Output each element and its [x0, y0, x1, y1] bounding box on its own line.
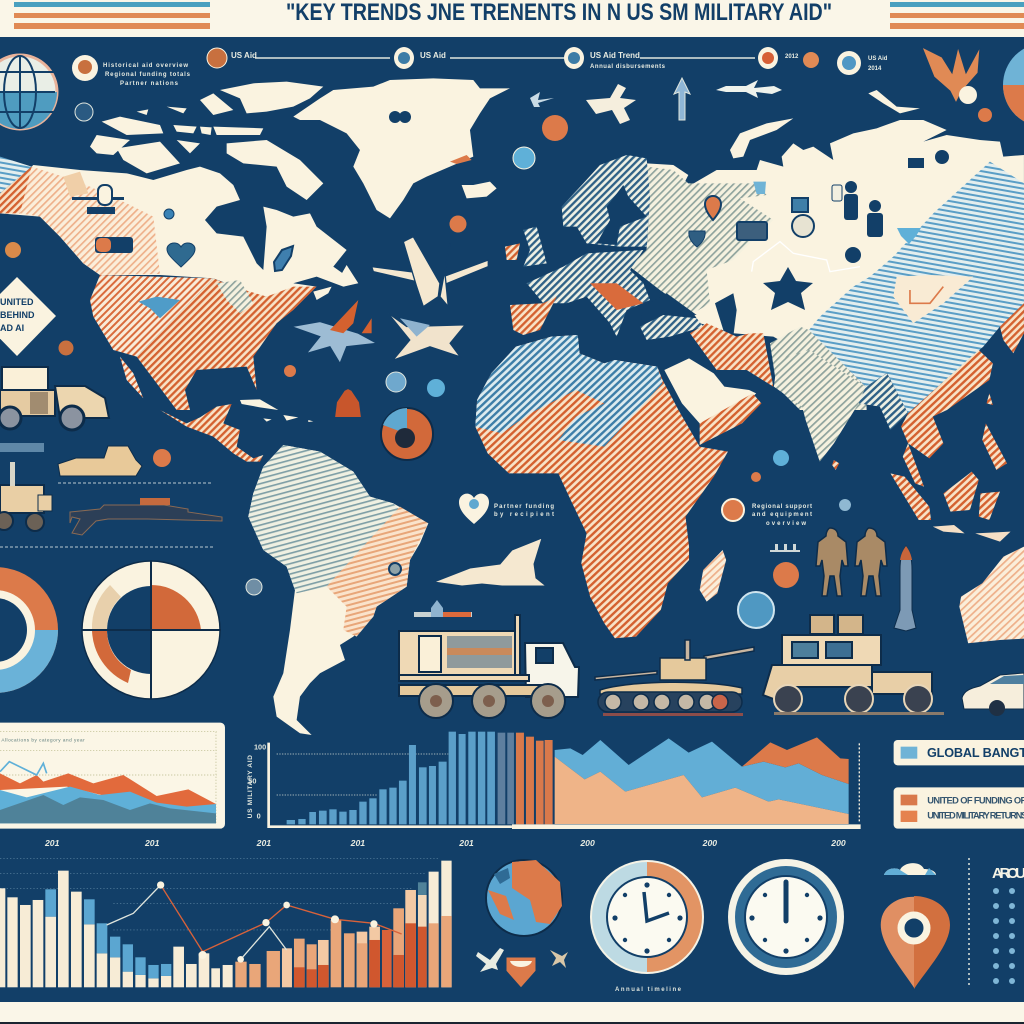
- teal cap: [418, 882, 427, 895]
- panel: area chart left: [0, 723, 474, 848]
- small globe: [486, 860, 562, 936]
- big truck: [399, 615, 579, 718]
- axis labels: [44, 838, 474, 848]
- Andes and Amazon hatch: [248, 445, 400, 593]
- axis labels: 201: [44, 838, 60, 848]
- timeline labels: US Aid: [420, 51, 446, 60]
- dark orange segments: [294, 916, 452, 987]
- legend text: Allocations by category and year: [1, 738, 85, 743]
- North Africa blue hatch: [475, 335, 663, 447]
- rocket: [894, 546, 916, 631]
- map: central america and south america: [160, 399, 428, 735]
- line chart grid: [0, 732, 217, 823]
- grid: [277, 754, 448, 795]
- Brazil hatch: [327, 507, 428, 637]
- Caribbean islands: [240, 399, 313, 422]
- Central America: [160, 404, 263, 462]
- South China and Indochina: [901, 350, 993, 458]
- peach bars: [235, 861, 452, 987]
- Central Europe hatched: [527, 250, 650, 337]
- blue blob: [753, 182, 766, 194]
- right callout: overview: [766, 521, 806, 527]
- heart callout: [459, 494, 554, 524]
- Spain: [510, 297, 557, 335]
- Iceland: [462, 182, 497, 198]
- right callout: [752, 504, 812, 527]
- Great Lakes hatch: [217, 280, 253, 313]
- big jet: [372, 237, 488, 307]
- Black Sea: [640, 293, 697, 327]
- Burma hatched: [859, 373, 908, 430]
- axis labels: [579, 838, 846, 848]
- y labels: 0: [257, 811, 261, 820]
- Korea and Japan orange: [1000, 303, 1024, 353]
- timeline labels: US Aid: [231, 51, 257, 60]
- Russia and Central Asia base: [630, 120, 1024, 370]
- Malay peninsula and Sumatra: [890, 443, 931, 520]
- bars: [287, 732, 553, 824]
- blue dot: [164, 209, 174, 219]
- delta jet: [434, 538, 546, 586]
- Alaska blue hatched: [0, 157, 32, 193]
- Asia icons: [689, 150, 949, 263]
- timeline labels: Historical aid overview: [103, 63, 188, 69]
- icon: bomb on chute: [334, 388, 362, 418]
- left armored truck: [0, 462, 52, 531]
- y labels: 100: [254, 742, 266, 751]
- louver: [419, 636, 441, 672]
- pie chart: [381, 408, 433, 460]
- timeline labels: Partner nations: [120, 81, 179, 87]
- timeline row: [72, 47, 888, 87]
- icon: map pin small: [705, 196, 721, 220]
- clock caption: Annual timeline: [615, 987, 682, 993]
- header stripes right: [890, 2, 1024, 29]
- armored vehicle: [763, 615, 944, 715]
- blue band: [555, 738, 849, 814]
- western Canada hatched: [20, 167, 160, 275]
- cab: [525, 643, 579, 697]
- Pakistan and north India hatched: [770, 327, 867, 410]
- y labels: US MILITARY AID: [247, 755, 254, 818]
- timeline labels: Regional funding totals: [105, 72, 191, 78]
- blue map mark: [138, 297, 180, 318]
- orange band: [742, 737, 849, 784]
- map: africa and south asia: [475, 335, 1024, 643]
- right callout: and equipment: [752, 512, 812, 518]
- map: north america: [0, 78, 510, 410]
- combo bar chart bottom: [0, 858, 452, 987]
- y labels: 50: [248, 776, 256, 785]
- map icons north america: [72, 185, 293, 271]
- Mongolia highlight: [893, 275, 973, 323]
- footer: [0, 1002, 1024, 1024]
- heart callout: Partner funding: [494, 504, 554, 510]
- timeline labels: Annual disbursements: [590, 64, 666, 70]
- car: [962, 673, 1024, 716]
- dotted figures grid: [993, 888, 1015, 984]
- diamond sign: [0, 277, 56, 356]
- clock 2: [728, 859, 844, 975]
- top planes: [434, 78, 782, 586]
- Greenland: [293, 78, 510, 218]
- Novaya Zemlya: [730, 118, 793, 158]
- Java and Timor: [933, 525, 1011, 542]
- jets: [292, 237, 488, 363]
- right callout: Regional support: [752, 504, 812, 510]
- legend: global: GLOBAL BANGT: [927, 746, 1024, 760]
- right fighter: [388, 313, 465, 360]
- line markers: [157, 881, 378, 963]
- western USA hatched: [90, 275, 213, 357]
- Australia: [959, 537, 1024, 643]
- border line: [752, 242, 860, 272]
- icon: ring and tag: [792, 198, 814, 237]
- teal area: [0, 795, 216, 823]
- stacked area chart: [512, 737, 861, 848]
- Svalbard: [868, 90, 920, 113]
- Asia blue hatched: [809, 162, 1024, 413]
- blue line: [0, 762, 47, 775]
- South America base: [248, 445, 428, 735]
- wheels: [419, 684, 565, 718]
- legend panel: [894, 740, 1024, 829]
- patrol ship: [58, 446, 142, 476]
- side dotted divider: [968, 858, 970, 988]
- side note: [992, 865, 1024, 984]
- axis labels: 201: [144, 838, 160, 848]
- Madagascar: [700, 550, 726, 602]
- medallions: [72, 47, 861, 81]
- Yemen and Oman: [700, 393, 761, 445]
- map: eurasia: [505, 90, 1024, 413]
- diamond sign: BEHIND: [0, 310, 35, 320]
- icon: map pin: [880, 896, 950, 989]
- star marker: [763, 267, 813, 310]
- Caspian Sea: [715, 293, 737, 337]
- timeline labels: 2014: [868, 66, 882, 72]
- chassis: [399, 675, 529, 681]
- UK: [523, 227, 547, 267]
- Sulawesi and Philippines: [979, 393, 1007, 520]
- axis labels: 200: [702, 838, 717, 848]
- y labels: [247, 742, 266, 820]
- Newfoundland and Nova Scotia: [313, 265, 358, 300]
- grid: [0, 858, 440, 930]
- timeline labels: US Aid Trend: [590, 51, 640, 60]
- Baja: [120, 357, 143, 398]
- header band: [0, 0, 1024, 37]
- timeline labels: US Aid: [868, 56, 888, 62]
- donut chart 2: [82, 561, 221, 699]
- eastern USA and Mexico: [137, 278, 317, 410]
- axis labels: 201: [458, 838, 474, 848]
- timeline labels: [103, 51, 888, 87]
- heart callout: by recipient: [494, 512, 554, 518]
- diamond sign: UNITED: [0, 297, 34, 307]
- icon: cloud: [884, 863, 936, 875]
- icon: badge: [845, 247, 861, 263]
- post: [515, 615, 520, 675]
- Baltic Sea: [597, 185, 647, 245]
- trend lines: [107, 885, 402, 958]
- Arctic plane strip: [728, 120, 792, 162]
- heart: [167, 243, 195, 267]
- cargo window: [447, 636, 512, 668]
- diamond sign: AD AI: [0, 323, 24, 333]
- Sri Lanka: [832, 460, 839, 470]
- axis line: [512, 820, 861, 834]
- icon: winged emblem: [922, 47, 980, 103]
- tank: [595, 640, 754, 716]
- arrow missile: [674, 78, 690, 120]
- icon: box: [737, 222, 767, 240]
- Africa: [475, 335, 728, 638]
- small turret icons: [770, 544, 800, 552]
- peach band: [555, 757, 849, 824]
- Canada mainland: [0, 165, 357, 297]
- Mongolia marks: [910, 287, 943, 303]
- globe icon: [0, 55, 57, 129]
- header stripes left: [14, 2, 210, 29]
- Greenland marker: [389, 111, 411, 123]
- donut chart 1: [0, 567, 58, 693]
- Alaska orange hatched: [0, 167, 32, 213]
- axis labels: 201: [256, 838, 271, 848]
- Scandinavia hatched: [562, 155, 650, 247]
- top left bar: [0, 443, 44, 452]
- clock 1: [590, 860, 704, 974]
- axis labels: 201: [350, 838, 365, 848]
- left fighter: [292, 300, 377, 363]
- Yukon peach: [63, 172, 88, 197]
- bar chart center: [247, 732, 553, 827]
- Arctic islands: [90, 82, 323, 200]
- Ukraine orange: [590, 283, 643, 310]
- blue area: [0, 787, 216, 823]
- legend: categories: [894, 787, 1024, 829]
- dotted divider lines: [0, 483, 213, 547]
- map markers: [5, 86, 992, 628]
- rifle: [70, 498, 222, 535]
- plane stand icon: [72, 185, 124, 214]
- Siberian figures: [832, 181, 883, 237]
- orange area: [0, 773, 216, 810]
- soldiers: [816, 528, 887, 596]
- Iran: [690, 323, 773, 387]
- icon: top badges: [908, 150, 949, 168]
- top truck icon: [414, 600, 472, 617]
- dashed axis: [857, 743, 861, 823]
- icon: blue triangle: [897, 228, 921, 244]
- pill icon: [95, 237, 133, 253]
- Turkey hatched: [640, 315, 703, 340]
- arrow plane: [716, 80, 782, 98]
- small plane: [530, 92, 554, 107]
- left truck: [0, 367, 109, 430]
- gear icon: [274, 246, 293, 271]
- western Russia hatched: [630, 167, 773, 313]
- timeline labels: 2012: [785, 54, 799, 60]
- India: [774, 350, 866, 462]
- right edge globe: [1003, 43, 1024, 127]
- axis: [269, 743, 512, 827]
- Borneo: [943, 472, 979, 512]
- axis labels: 200: [579, 838, 595, 848]
- axis labels: 200: [830, 838, 846, 848]
- small icons below globe: [476, 948, 568, 988]
- icon: shield: [689, 231, 705, 247]
- blue bar tops: [45, 889, 171, 978]
- Arabia: [664, 358, 756, 423]
- Greenland orange detail: [450, 155, 472, 164]
- Ireland: [505, 243, 520, 260]
- cream bars: [0, 871, 233, 987]
